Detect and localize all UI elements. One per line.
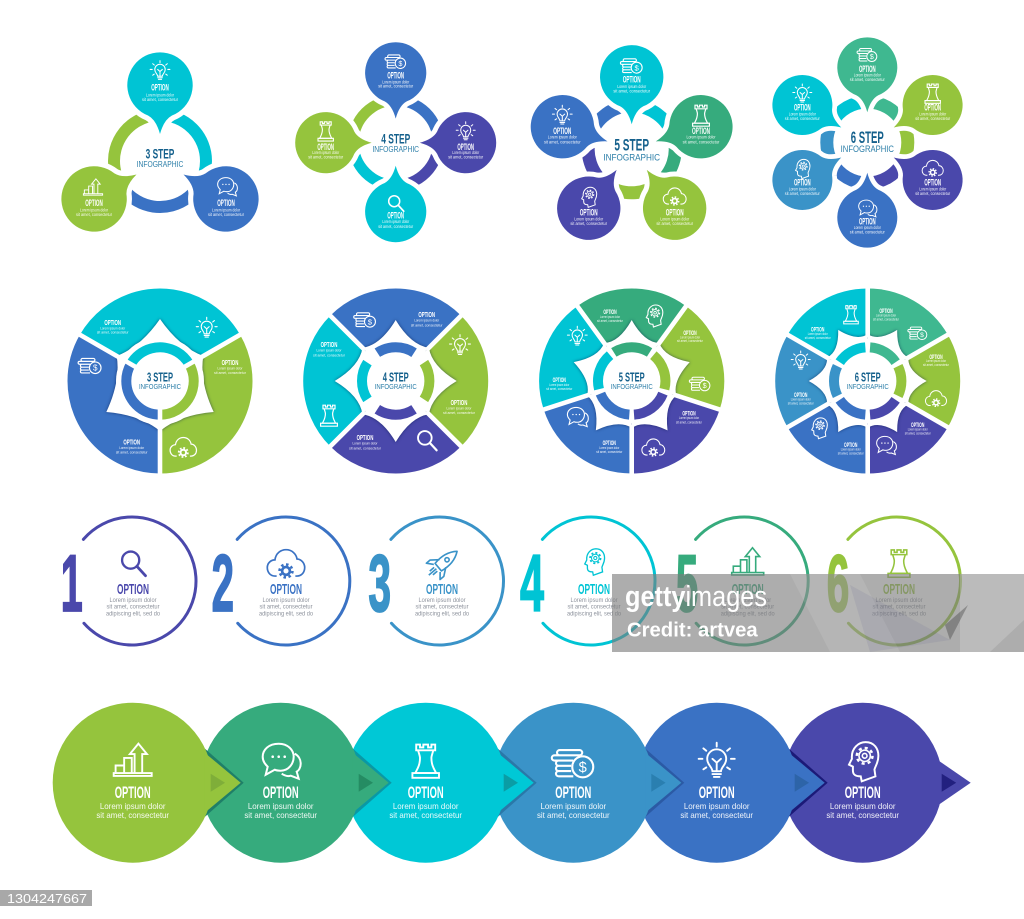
segment: lower right: sit amet, consectetur bbox=[905, 431, 931, 435]
bubble: upper right option: OPTION bbox=[924, 103, 941, 113]
heading: INFOGRAPHIC bbox=[137, 160, 184, 169]
heading bbox=[375, 370, 417, 391]
segment: right: OPTION bbox=[929, 355, 943, 361]
segment: top bbox=[97, 317, 223, 444]
segment: upper left: sit amet, consectetur bbox=[805, 336, 831, 340]
segment: lower right: OPTION bbox=[911, 423, 924, 429]
bubble: right option: OPTION bbox=[457, 142, 474, 152]
connector arcs bbox=[571, 89, 692, 210]
chain step 6 bbox=[783, 703, 971, 863]
segment: upper left: Lorem ipsum dolor bbox=[808, 332, 828, 336]
panel: 3 step pie bbox=[78, 317, 247, 476]
segment: left: OPTION bbox=[553, 378, 566, 384]
segment: right: sit amet, consectetur bbox=[923, 363, 950, 367]
heading: INFOGRAPHIC bbox=[372, 145, 419, 154]
arrow circle chain bbox=[53, 703, 971, 863]
segment: right: Lorem ipsum dolor bbox=[446, 407, 472, 411]
numbered step 4: sit amet, consectetur bbox=[568, 603, 620, 610]
panel: 4 step bubble diagram bbox=[295, 42, 496, 242]
segment: bottom: Lorem ipsum dolor bbox=[352, 442, 378, 446]
numbered step 2: Lorem ipsum dolor bbox=[262, 597, 310, 604]
numbered step 4: Lorem ipsum dolor bbox=[570, 597, 618, 604]
heading bbox=[603, 136, 660, 163]
bubble: top option: sit amet, consectetur bbox=[378, 84, 414, 89]
bubble: top option: sit amet, consectetur bbox=[613, 88, 651, 93]
bubble: top option: Lorem ipsum dolor bbox=[854, 73, 881, 78]
bubble: lower right option bbox=[879, 132, 974, 221]
bubble: top option bbox=[600, 45, 663, 124]
segment: upper right: Lorem ipsum dolor bbox=[876, 313, 897, 317]
inner ring bbox=[349, 334, 442, 428]
chain step 6: OPTION bbox=[845, 784, 881, 802]
bubble: left option: Lorem ipsum dolor bbox=[548, 135, 577, 140]
chain step 3: OPTION bbox=[408, 784, 444, 802]
numbered step 6: OPTION bbox=[883, 581, 915, 598]
bubble: top option bbox=[837, 37, 897, 112]
numbered step 3: adipiscing elit, sed do bbox=[415, 610, 470, 617]
segment: lower right: Lorem ipsum dolor bbox=[908, 427, 928, 431]
heading: INFOGRAPHIC bbox=[375, 384, 417, 391]
bubble: upper left option: Lorem ipsum dolor bbox=[789, 112, 816, 116]
numbered step 1: OPTION bbox=[117, 581, 149, 598]
segment: top: sit amet, consectetur bbox=[597, 319, 624, 323]
chain step 3: Lorem ipsum dolor bbox=[393, 802, 459, 811]
bubble: bottom option: sit amet, consectetur bbox=[850, 229, 885, 234]
bubble: lower right option: sit amet, consectetur bbox=[915, 191, 951, 196]
bubble: right option: sit amet, consectetur bbox=[448, 155, 484, 160]
panel: 3 step bubble diagram bbox=[49, 52, 271, 244]
bubble: lower left option bbox=[761, 132, 856, 221]
bubble: top option: sit amet, consectetur bbox=[142, 97, 178, 102]
chain step 6: Lorem ipsum dolor bbox=[830, 802, 896, 811]
bubble: lower left option: OPTION bbox=[794, 178, 811, 188]
bubble: left option bbox=[522, 87, 617, 172]
bubble: bottom option: Lorem ipsum dolor bbox=[382, 219, 410, 224]
watermark credit: Credit: artvea bbox=[627, 620, 759, 642]
bubble: upper right option: Lorem ipsum dolor bbox=[919, 112, 947, 116]
centre star bbox=[809, 318, 927, 444]
segment: lower left bbox=[812, 335, 914, 455]
numbered step 3: OPTION bbox=[426, 581, 458, 598]
connector arcs bbox=[97, 98, 223, 224]
heading: 4 STEP bbox=[381, 130, 410, 146]
heading: 3 STEP bbox=[147, 370, 173, 384]
numbered step 2 bbox=[196, 491, 376, 671]
chain step 4 bbox=[493, 703, 684, 863]
chain step 2: Lorem ipsum dolor bbox=[248, 802, 314, 811]
segment: top bbox=[567, 305, 696, 446]
segment: lower right: OPTION bbox=[682, 411, 696, 417]
chain step 4: OPTION bbox=[555, 784, 591, 802]
segment: lower right bbox=[573, 323, 703, 456]
chain step 4: sit amet, consectetur bbox=[537, 811, 610, 820]
bubble: right option: OPTION bbox=[692, 126, 710, 137]
bubble: left option: OPTION bbox=[553, 126, 571, 137]
heading: INFOGRAPHIC bbox=[603, 152, 660, 163]
chain step 1: sit amet, consectetur bbox=[96, 811, 169, 820]
numbered step 6: adipiscing elit, sed do bbox=[872, 610, 927, 617]
heading bbox=[372, 130, 419, 154]
bubble: lower left option: sit amet, consectetur bbox=[570, 221, 608, 226]
bubble: lower left option: OPTION bbox=[580, 208, 598, 219]
numbered step 2: adipiscing elit, sed do bbox=[259, 610, 314, 617]
chain step 1 bbox=[53, 703, 244, 863]
segment: left bbox=[313, 316, 461, 446]
centre star bbox=[565, 320, 698, 447]
bubble: top option: OPTION bbox=[387, 70, 404, 80]
bubble: right option: Lorem ipsum dolor bbox=[686, 135, 716, 140]
bubble: top option: Lorem ipsum dolor bbox=[382, 79, 410, 84]
segment: top: OPTION bbox=[603, 310, 617, 316]
segment: lower left: sit amet, consectetur bbox=[596, 450, 623, 454]
segment: lower left: sit amet, consectetur bbox=[838, 451, 864, 455]
segment: left: sit amet, consectetur bbox=[116, 451, 148, 455]
segment: left: sit amet, consectetur bbox=[313, 353, 346, 357]
panel: 4 step pie bbox=[313, 312, 476, 451]
inner ring bbox=[584, 334, 679, 428]
bubble: top option: OPTION bbox=[623, 75, 641, 86]
bubble: lower left option: Lorem ipsum dolor bbox=[789, 186, 816, 192]
segment: upper right: OPTION bbox=[683, 331, 697, 337]
chain step 2: sit amet, consectetur bbox=[244, 811, 317, 820]
heading: INFOGRAPHIC bbox=[139, 384, 181, 391]
segment: top: sit amet, consectetur bbox=[97, 331, 129, 335]
numbered step 5: OPTION bbox=[732, 581, 764, 598]
numbered step 1 bbox=[42, 491, 222, 671]
numbered step 4: 4 bbox=[520, 539, 544, 629]
numbered step 3 bbox=[349, 491, 530, 671]
numbered step 2: 2 bbox=[212, 539, 234, 629]
image id tag: 1304247667 bbox=[7, 892, 87, 906]
bubble: right option: sit amet, consectetur bbox=[208, 212, 244, 217]
bubble: top option: Lorem ipsum dolor bbox=[617, 84, 647, 89]
segment: upper right: sit amet, consectetur bbox=[677, 339, 704, 343]
segment: top: Lorem ipsum dolor bbox=[600, 315, 621, 319]
numbered step 3: Lorem ipsum dolor bbox=[418, 597, 466, 604]
segment: right: OPTION bbox=[451, 400, 467, 407]
heading bbox=[137, 145, 184, 169]
chain step 5: OPTION bbox=[699, 784, 735, 802]
heading: 4 STEP bbox=[383, 370, 409, 384]
centre star bbox=[85, 319, 235, 449]
panel: 5 step bubble diagram bbox=[522, 45, 741, 252]
segment: lower left: OPTION bbox=[844, 443, 857, 449]
bubble: right option: Lorem ipsum dolor bbox=[212, 208, 240, 213]
chain step 2 bbox=[201, 703, 392, 863]
bubble: lower right option: sit amet, consectetur bbox=[656, 221, 694, 226]
segment: top: OPTION bbox=[104, 320, 121, 327]
bubble: top option: sit amet, consectetur bbox=[850, 77, 885, 82]
heading bbox=[611, 370, 653, 391]
segment: right bbox=[805, 318, 950, 444]
numbered step 6 bbox=[806, 491, 987, 671]
numbered step 5: adipiscing elit, sed do bbox=[721, 610, 775, 617]
bubble: right option bbox=[646, 87, 741, 172]
segment: top bbox=[330, 312, 461, 446]
bubble: left option: sit amet, consectetur bbox=[76, 212, 112, 217]
bubble: lower right option: Lorem ipsum dolor bbox=[660, 216, 690, 221]
segment: left: OPTION bbox=[321, 342, 337, 349]
inner ring bbox=[821, 334, 914, 428]
connector arcs bbox=[812, 87, 923, 198]
segment: left: OPTION bbox=[123, 440, 140, 446]
segment: left: sit amet, consectetur bbox=[546, 387, 573, 391]
segment: right bbox=[330, 316, 476, 446]
segment: left bbox=[78, 335, 206, 455]
bubble: upper left option: OPTION bbox=[794, 103, 811, 113]
bubble: right option bbox=[420, 112, 496, 173]
inner ring bbox=[114, 335, 206, 427]
bubble: bottom option: Lorem ipsum dolor bbox=[854, 225, 881, 230]
segment: left: Lorem ipsum dolor bbox=[119, 446, 145, 450]
heading: 6 STEP bbox=[855, 370, 881, 384]
bubble: lower right option: Lorem ipsum dolor bbox=[919, 186, 947, 192]
bubble: upper left option bbox=[761, 64, 856, 153]
bubble: left option: OPTION bbox=[85, 198, 103, 209]
heading bbox=[847, 370, 889, 391]
heading: 5 STEP bbox=[619, 370, 645, 384]
heading: 3 STEP bbox=[146, 145, 174, 161]
segment: bottom bbox=[330, 316, 461, 451]
numbered step 1: 1 bbox=[61, 539, 83, 629]
bubble: lower left option: Lorem ipsum dolor bbox=[574, 216, 604, 221]
segment: right: sit amet, consectetur bbox=[214, 371, 247, 375]
bubble: bottom option: OPTION bbox=[387, 210, 404, 220]
image id tag bbox=[0, 890, 92, 906]
chain step 3 bbox=[346, 703, 537, 863]
segment: upper left bbox=[805, 306, 931, 444]
bubble: left option: Lorem ipsum dolor bbox=[80, 208, 108, 213]
bubble: right option: OPTION bbox=[217, 198, 235, 209]
numbered step 5: sit amet, consectetur bbox=[721, 603, 774, 610]
bubble: top option: OPTION bbox=[859, 64, 876, 74]
bubble: upper right option: sit amet, consectetur bbox=[915, 116, 951, 121]
segment: top: sit amet, consectetur bbox=[411, 323, 443, 327]
bubble: right option: Lorem ipsum dolor bbox=[452, 150, 480, 155]
chain step 2: OPTION bbox=[263, 784, 299, 802]
segment: right: Lorem ipsum dolor bbox=[218, 367, 243, 371]
chain step 5: Lorem ipsum dolor bbox=[684, 802, 750, 811]
segment: right: OPTION bbox=[222, 360, 238, 367]
segment: left: Lorem ipsum dolor bbox=[316, 349, 342, 353]
segment: lower left: OPTION bbox=[603, 441, 616, 447]
segment: right: sit amet, consectetur bbox=[443, 411, 476, 415]
bubble: left option: OPTION bbox=[317, 142, 334, 152]
chain step 6: sit amet, consectetur bbox=[826, 811, 899, 820]
heading: INFOGRAPHIC bbox=[847, 384, 889, 391]
bubble: top option bbox=[127, 52, 193, 134]
segment: bottom: sit amet, consectetur bbox=[349, 447, 382, 451]
segment: left: OPTION bbox=[794, 393, 807, 399]
segment: bottom: OPTION bbox=[357, 435, 373, 442]
heading bbox=[841, 129, 894, 154]
numbered step 3: 3 bbox=[368, 539, 391, 629]
segment: upper right: OPTION bbox=[879, 309, 893, 315]
bubble: top option bbox=[365, 42, 426, 119]
numbered step 5 bbox=[654, 491, 834, 671]
bubble: left option bbox=[295, 112, 372, 173]
bubble: left option: sit amet, consectetur bbox=[308, 155, 344, 160]
numbered step 1: Lorem ipsum dolor bbox=[110, 597, 156, 604]
segment: lower right: Lorem ipsum dolor bbox=[679, 416, 700, 420]
centre star bbox=[335, 320, 457, 442]
segment: left bbox=[546, 323, 690, 439]
numbered step 6: 6 bbox=[827, 539, 849, 629]
segment: lower right: sit amet, consectetur bbox=[676, 420, 703, 424]
bubble: bottom option bbox=[365, 166, 426, 242]
segment: upper right bbox=[567, 316, 710, 446]
numbered step 4 bbox=[501, 491, 681, 671]
numbered step 2: OPTION bbox=[270, 581, 302, 598]
segment: left: sit amet, consectetur bbox=[788, 401, 814, 405]
heading: INFOGRAPHIC bbox=[841, 144, 894, 154]
heading: INFOGRAPHIC bbox=[611, 384, 653, 391]
segment: upper right bbox=[821, 309, 927, 427]
segment: right: Lorem ipsum dolor bbox=[926, 359, 947, 363]
chain step 1: OPTION bbox=[115, 784, 151, 802]
segment: lower right bbox=[805, 318, 931, 455]
chain step 5: sit amet, consectetur bbox=[680, 811, 753, 820]
numbered step 6: Lorem ipsum dolor bbox=[876, 597, 922, 604]
bubble: lower left option: sit amet, consectetur bbox=[785, 191, 820, 196]
heading: 5 STEP bbox=[614, 136, 649, 154]
bubble: left option: sit amet, consectetur bbox=[544, 139, 581, 144]
numbered step 3: sit amet, consectetur bbox=[416, 603, 468, 610]
heading: 6 STEP bbox=[851, 129, 884, 147]
chain step 5 bbox=[637, 703, 828, 863]
panel: 5 step pie bbox=[541, 304, 722, 476]
watermark band bbox=[612, 574, 1024, 652]
bubble: top option: OPTION bbox=[151, 83, 169, 94]
bubble: right option bbox=[167, 146, 271, 244]
segment: top: Lorem ipsum dolor bbox=[414, 319, 440, 323]
bubble: lower right option bbox=[621, 151, 719, 252]
bubble: left option bbox=[49, 146, 153, 244]
segment: top: OPTION bbox=[418, 312, 435, 319]
watermark logo: gettyimages bbox=[625, 581, 767, 613]
segment: left: Lorem ipsum dolor bbox=[791, 397, 811, 401]
bubble: lower right option: OPTION bbox=[924, 178, 941, 188]
segment: lower left: Lorem ipsum dolor bbox=[841, 447, 861, 451]
segment: top: Lorem ipsum dolor bbox=[100, 327, 126, 331]
segment: upper left: OPTION bbox=[811, 327, 824, 333]
numbered step 4: adipiscing elit, sed do bbox=[567, 610, 622, 617]
bubble: left option: Lorem ipsum dolor bbox=[312, 150, 340, 155]
numbered step 6: sit amet, consectetur bbox=[872, 603, 926, 610]
segment: left bbox=[788, 318, 931, 444]
bubble: bottom option: OPTION bbox=[859, 216, 876, 226]
chain step 3: sit amet, consectetur bbox=[389, 811, 462, 820]
numbered step 4: OPTION bbox=[578, 581, 610, 598]
bubble: right option: sit amet, consectetur bbox=[683, 139, 720, 144]
bubble: bottom option: sit amet, consectetur bbox=[378, 224, 414, 229]
panel: 6 step bubble diagram bbox=[761, 37, 974, 248]
chain step 1: Lorem ipsum dolor bbox=[100, 802, 166, 811]
numbered step 5: Lorem ipsum dolor bbox=[724, 597, 771, 604]
segment: right bbox=[97, 318, 247, 457]
segment: lower left bbox=[567, 335, 678, 454]
bubble: lower left option bbox=[545, 151, 642, 252]
panel: 6 step pie bbox=[785, 286, 950, 476]
bubble: bottom option bbox=[837, 173, 897, 248]
numbered step 1: sit amet, consectetur bbox=[106, 603, 160, 610]
segment: left: Lorem ipsum dolor bbox=[549, 383, 570, 387]
numbered step 2: sit amet, consectetur bbox=[260, 603, 312, 610]
bubble: upper right option bbox=[879, 64, 974, 153]
bubble: top option: Lorem ipsum dolor bbox=[146, 92, 174, 97]
bubble: lower right option: OPTION bbox=[666, 208, 684, 219]
segment: upper right: Lorem ipsum dolor bbox=[680, 335, 701, 339]
numbered step 1: adipiscing elit, sed do bbox=[106, 610, 161, 617]
heading bbox=[139, 370, 181, 391]
numbered step 5: 5 bbox=[676, 539, 698, 629]
connector arcs bbox=[353, 100, 438, 185]
bubble: upper left option: sit amet, consectetur bbox=[785, 116, 820, 121]
segment: upper right: sit amet, consectetur bbox=[873, 317, 900, 321]
segment: lower left: Lorem ipsum dolor bbox=[599, 446, 620, 450]
chain step 4: Lorem ipsum dolor bbox=[540, 802, 606, 811]
